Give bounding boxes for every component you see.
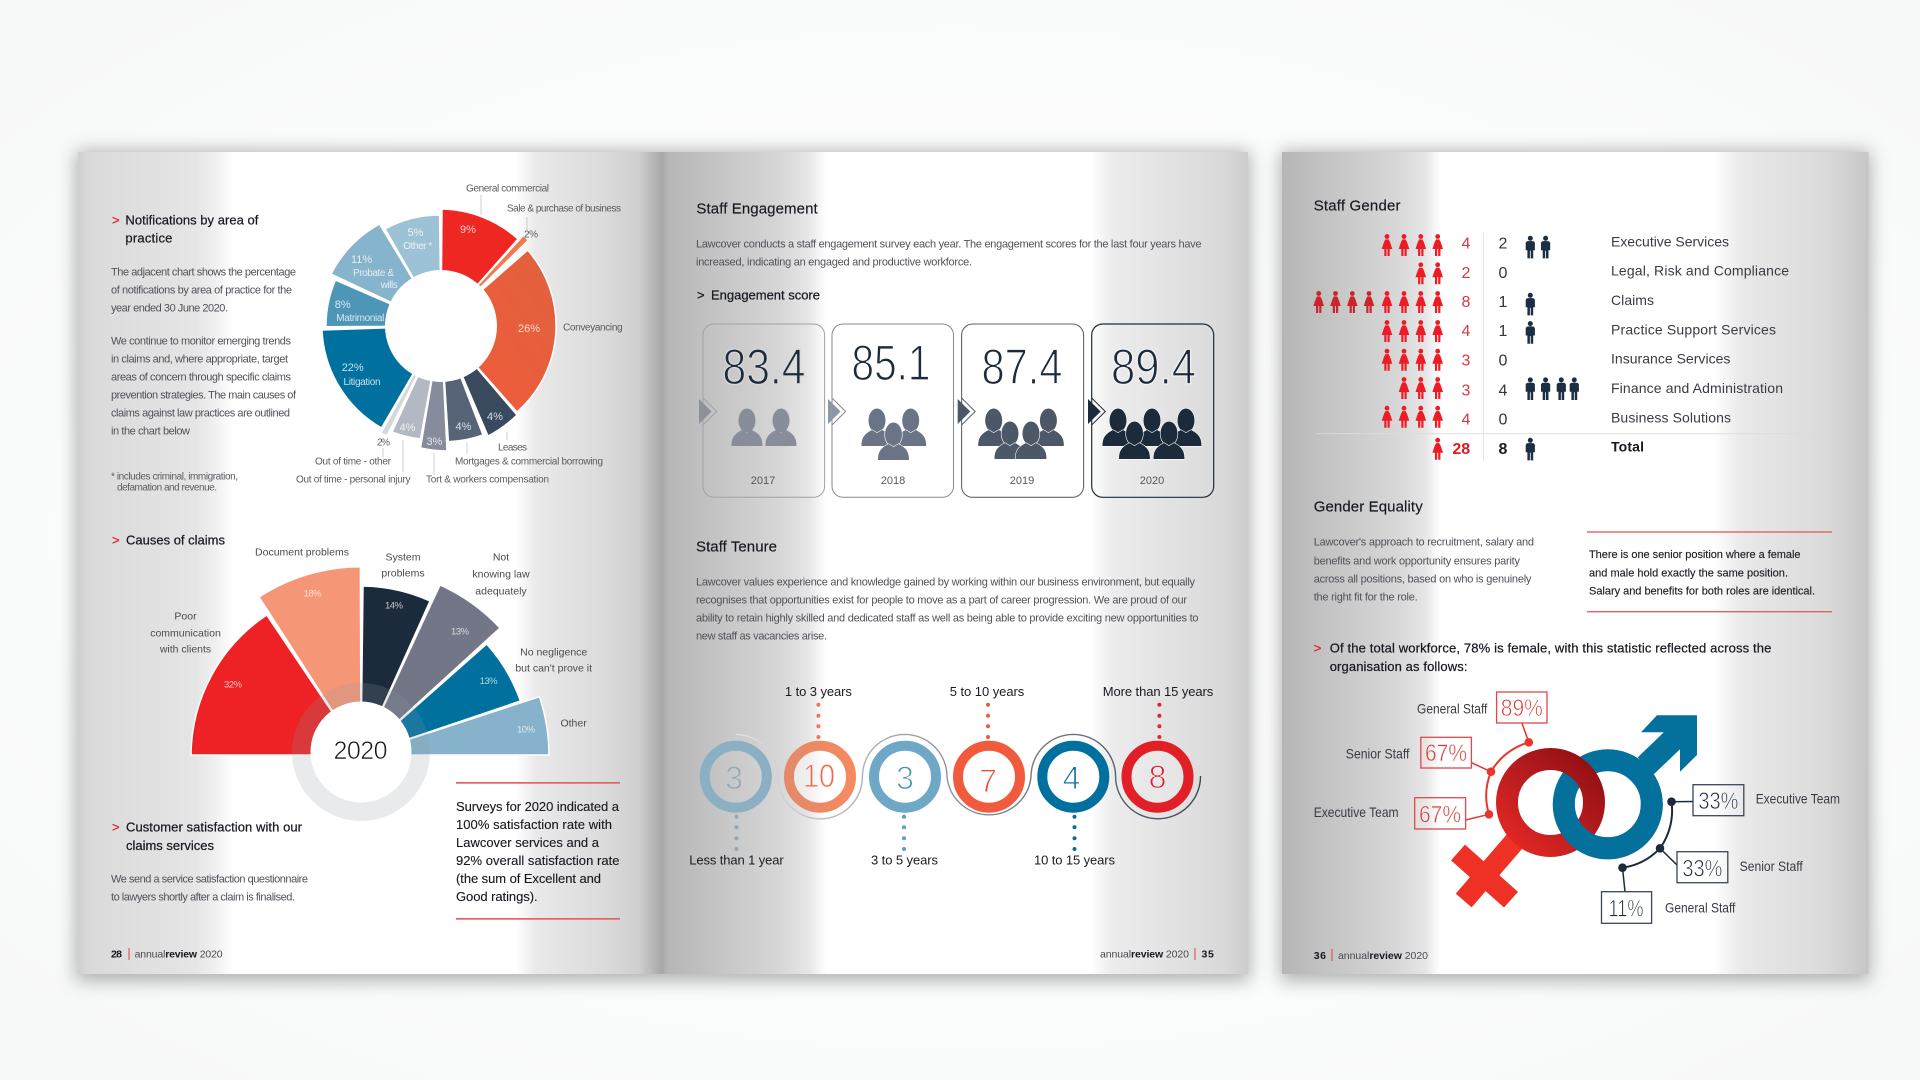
score 87.4: 87.4 <box>982 339 1062 395</box>
text block: engagement intro: Lawcover conducts a staff engagement survey each year. The engagement scores for the last four years have <box>696 239 1202 251</box>
female counts <box>1452 236 1471 458</box>
tenure: 1 to 3 years: 1 to 3 years <box>785 684 852 699</box>
text block: notifications intro: prevention strategies. The main causes of <box>111 390 297 402</box>
footer: page 36: 36 <box>1314 950 1326 962</box>
department labels: Insurance Services <box>1611 351 1730 367</box>
segment: personal injury 4% <box>392 326 441 439</box>
text block: engagement intro <box>696 239 1202 269</box>
donut value labels: Probate & <box>353 268 394 279</box>
fan centre: 2020 <box>310 702 412 802</box>
labels: male callouts <box>1665 791 1840 916</box>
text block: notifications intro: in the chart below <box>111 426 190 438</box>
labels: male callouts: Executive Team <box>1756 791 1840 807</box>
callout: survey results: Lawcover services and a <box>456 835 600 850</box>
labels: male callouts: Senior Staff <box>1740 858 1803 874</box>
donut outer labels: General commercial <box>466 183 549 194</box>
fan outer labels: No negligence <box>520 646 587 658</box>
box: general staff 11% <box>1602 892 1652 923</box>
fan percentage labels: 32% <box>224 680 243 690</box>
text block: tenure intro: ability to retain highly skilled and dedicated staff as well as being able to provide exciting new opportunities to <box>696 613 1198 625</box>
fan outer labels: Other <box>560 718 587 730</box>
donut value labels: 22% <box>342 362 364 374</box>
year 2017: 2017 <box>751 475 775 487</box>
female counts: 3 <box>1462 352 1471 370</box>
male symbol <box>1564 715 1697 848</box>
text block: customer satisfaction: to lawyers shortly after a claim is finalised. <box>111 892 295 904</box>
segment: sale of business 2% <box>441 236 528 326</box>
callout: senior position <box>1587 531 1832 612</box>
donut value labels: wills <box>380 280 398 291</box>
donut value labels: 4% <box>456 421 472 433</box>
donut outer labels: Out of time - other <box>315 456 392 467</box>
chevron arrow 2017 <box>699 398 717 425</box>
fan outer labels: but can't prove it <box>515 662 592 674</box>
male counts: 8 <box>1499 441 1508 458</box>
male counts: 0 <box>1499 412 1508 428</box>
department labels: Business Solutions <box>1611 409 1731 425</box>
wave line through tenure circles <box>736 734 1201 819</box>
labels: male callouts: General Staff <box>1665 900 1735 916</box>
heading: engagement score: Engagement score <box>711 287 820 302</box>
text block: notifications intro: of notifications by area of practice for the <box>111 285 292 297</box>
text block: notifications intro: We continue to monitor emerging trends <box>111 336 292 348</box>
male counts: 0 <box>1499 352 1508 370</box>
callout: senior position: and male hold exactly the same position. <box>1589 567 1788 579</box>
fan percentage labels: 18% <box>304 588 322 600</box>
heading: customer satisfaction: Customer satisfaction with our <box>126 819 303 834</box>
tenure: 3 to 5 years: 3 <box>896 760 914 796</box>
donut outer labels: 2% <box>524 229 538 240</box>
donut outer labels: Out of time - personal injury <box>296 474 410 485</box>
tenure: 5 to 10 years: 5 to 10 years <box>950 684 1025 699</box>
heading: total workforce: Of the total workforce, 78% is female, with this statistic reflected across the <box>1330 640 1771 655</box>
segment: litigation 22% <box>322 326 441 428</box>
fan outer labels: with clients <box>159 644 211 656</box>
text block: notifications intro: claims against law practices are outlined <box>111 408 290 420</box>
text block: gender equality: Lawcover's approach to recruitment, salary and <box>1314 537 1534 549</box>
segment: out of time other 2% <box>382 326 441 435</box>
female counts: 28 <box>1452 441 1470 458</box>
segment: leases 4% <box>441 326 517 436</box>
page shadows <box>76 151 1870 981</box>
fan percentage labels: 13% <box>480 676 498 687</box>
tenure: less than 1 year: Less than 1 year <box>689 853 784 868</box>
text block: tenure intro <box>696 576 1198 643</box>
male counts: 1 <box>1499 294 1508 311</box>
card: 2019 score <box>958 324 1084 497</box>
tenure: 3 to 5 years <box>871 746 938 868</box>
fan outer labels: Poor <box>174 610 197 622</box>
heading: causes of claims: > <box>112 532 120 547</box>
people icons 2020 <box>1102 408 1202 459</box>
wedge: system problems 14% <box>361 586 430 755</box>
male counts: 2 <box>1499 236 1508 252</box>
text block: gender equality <box>1314 537 1534 604</box>
segment: general commercial 9% <box>441 209 518 326</box>
donut value labels: 4% <box>487 411 503 423</box>
wedge: not knowing law 13% <box>361 585 500 755</box>
dividers for gender table <box>1316 233 1833 462</box>
fan percentage labels: 14% <box>385 600 404 612</box>
callout: survey results: Good ratings). <box>456 889 538 904</box>
fan percentage labels: 10% <box>517 724 536 736</box>
department labels: Practice Support Services <box>1611 321 1776 337</box>
text block: notifications intro <box>111 267 297 438</box>
heading: causes of claims: Causes of claims <box>126 532 226 547</box>
card: 2018 score <box>828 324 954 497</box>
tenure: more than 15 years <box>1103 684 1214 808</box>
donut value labels: 11% <box>351 254 372 266</box>
donut outer labels: Leases <box>498 442 527 453</box>
text block: customer satisfaction <box>111 874 308 904</box>
labels: female callouts <box>1314 701 1487 820</box>
people icons 2018 <box>862 408 926 460</box>
department labels: Executive Services <box>1611 233 1729 249</box>
labels: female callouts: Senior Staff <box>1346 745 1409 761</box>
fan chart: causes of claims <box>191 567 549 755</box>
segment: mortgages 4% <box>441 326 483 442</box>
department labels: Legal, Risk and Compliance <box>1611 263 1789 279</box>
box: senior staff 67%: 67% <box>1425 740 1467 767</box>
fan percentage labels: 13% <box>451 626 470 638</box>
tenure: 10 to 15 years <box>1034 746 1116 868</box>
text block: notifications intro: year ended 30 June 2020. <box>111 303 228 315</box>
heading: notifications by area of practice: > <box>112 212 120 228</box>
donut value labels: 8% <box>335 299 351 311</box>
tenure: 1 to 3 years <box>785 684 852 808</box>
footer: page 28: annualreview 2020 <box>135 948 223 960</box>
card: 2020 score <box>1088 324 1214 497</box>
segment: probate 11% <box>331 224 441 326</box>
donut outer labels: Sale & purchase of business <box>507 203 621 214</box>
fan outer labels: System <box>385 552 421 564</box>
fan outer labels: Document problems <box>255 546 349 558</box>
score 85.1: 85.1 <box>852 335 930 391</box>
text block: engagement intro: increased, indicating an engaged and productive workforce. <box>696 257 972 269</box>
heading: total workforce: organisation as follows: <box>1330 659 1468 674</box>
donut hole <box>385 270 497 382</box>
tenure: 10 to 15 years: 10 to 15 years <box>1034 853 1116 868</box>
labels: female callouts: General Staff <box>1417 701 1487 717</box>
heading: customer satisfaction: > <box>112 819 120 834</box>
female counts: 4 <box>1462 412 1471 428</box>
donut outer labels: Mortgages & commercial borrowing <box>455 456 603 467</box>
tenure: more than 15 years: 8 <box>1149 759 1166 795</box>
wedge: no negligence 13% <box>361 644 520 755</box>
footer: page 36: annualreview 2020 <box>1338 950 1428 962</box>
donut value labels: 26% <box>518 323 540 335</box>
heading: notifications by area of practice <box>112 212 259 246</box>
tenure: less than 1 year: 3 <box>725 760 743 796</box>
text block: gender equality: the right fit for the role. <box>1314 592 1418 604</box>
donut chart: notifications by area <box>322 209 556 451</box>
footnote <box>111 472 238 494</box>
segment: tort 3% <box>420 326 447 451</box>
score 89.4: 89.4 <box>1111 339 1196 395</box>
text block: notifications intro: in claims and, where appropriate, target <box>111 354 288 366</box>
footnote: * includes criminal, immigration, <box>111 472 238 482</box>
footer: page 28: 28 <box>111 948 122 960</box>
chevron arrow 2019 <box>958 398 975 425</box>
tenure: 5 to 10 years <box>950 684 1025 808</box>
department labels <box>1611 233 1789 455</box>
callout: survey results: (the sum of Excellent and <box>456 871 601 886</box>
female counts: 4 <box>1462 323 1471 340</box>
heading: gender equality: Gender Equality <box>1314 498 1423 515</box>
interlock overlap <box>1552 803 1663 860</box>
female counts: 4 <box>1462 236 1471 252</box>
box: general staff 11%: 11% <box>1608 896 1644 922</box>
callout: survey results: 100% satisfaction rate with <box>456 817 612 832</box>
chevron arrow 2020 <box>1088 398 1105 425</box>
wedge: poor communication 32% <box>191 615 361 755</box>
segment: conveyancing 26% <box>441 250 556 412</box>
fan outer labels: communication <box>150 628 221 640</box>
donut outer labels: 2% <box>377 437 390 448</box>
heading: staff tenure: Staff Tenure <box>696 538 777 555</box>
fan percentage labels <box>224 588 536 736</box>
donut value labels: 3% <box>426 436 443 448</box>
fan outer labels: problems <box>381 568 425 580</box>
male counts: 4 <box>1499 382 1508 400</box>
callout: survey results: Surveys for 2020 indicated a <box>456 799 620 814</box>
pictogram: male staff icons <box>1526 236 1579 460</box>
year 2019: 2019 <box>1010 475 1034 487</box>
footer: page 35: annualreview 2020 <box>1100 948 1189 960</box>
text block: gender equality: across all positions, based on who is genuinely <box>1314 573 1532 585</box>
segment: matrimonial 8% <box>326 280 441 327</box>
department labels: Finance and Administration <box>1611 380 1783 396</box>
heading: total workforce: > <box>1314 640 1321 655</box>
donut leader lines <box>383 195 527 475</box>
card: 2017 score <box>699 324 825 497</box>
department labels: Total <box>1611 439 1644 455</box>
male counts: 0 <box>1499 265 1508 282</box>
male counts: 1 <box>1499 323 1508 340</box>
box: general staff 89%: 89% <box>1501 695 1543 722</box>
department labels: Claims <box>1611 292 1654 308</box>
heading: notifications by area of practice: practice <box>125 230 172 246</box>
box: senior staff 33%: 33% <box>1682 856 1722 882</box>
text block: tenure intro: Lawcover values experience and knowledge gained by working within our business environment, but equally <box>696 576 1196 588</box>
female counts: 8 <box>1462 294 1471 311</box>
callout: senior position: There is one senior position where a female <box>1589 549 1800 561</box>
heading: engagement score: > <box>697 287 705 302</box>
female counts: 2 <box>1462 265 1471 282</box>
people icons 2017 <box>732 408 796 446</box>
callout: senior position: Salary and benefits for both roles are identical. <box>1589 586 1815 598</box>
heading: total workforce <box>1314 640 1771 674</box>
wedge: document problems 18% <box>259 567 361 755</box>
female symbol <box>1458 759 1594 900</box>
fan outer labels <box>150 546 592 730</box>
tenure: 10 to 15 years: 4 <box>1063 760 1080 796</box>
donut outer labels <box>296 183 623 485</box>
year 2018: 2018 <box>881 475 905 487</box>
tenure: more than 15 years: More than 15 years <box>1103 684 1214 699</box>
tenure: 5 to 10 years: 7 <box>979 763 997 799</box>
box: executive team 67%: 67% <box>1419 802 1461 828</box>
donut value labels: 9% <box>460 224 476 236</box>
icon: interlocked gender symbols <box>1458 715 1697 900</box>
panel: left page <box>78 152 662 974</box>
donut value labels: Matrimonial <box>336 313 384 324</box>
tenure: 3 to 5 years: 3 to 5 years <box>871 853 938 868</box>
donut outer labels: Tort & workers compensation <box>426 474 549 485</box>
heading: customer satisfaction <box>112 819 303 853</box>
heading: staff gender: Staff Gender <box>1314 198 1400 214</box>
fan outer labels: adequately <box>475 586 527 598</box>
footnote: defamation and revenue. <box>117 482 217 494</box>
footer: page 35: 35 <box>1202 948 1214 960</box>
text block: tenure intro: new staff as vacancies arise. <box>696 631 827 643</box>
tenure: 1 to 3 years: 10 <box>803 758 835 794</box>
callout: survey results: 92% overall satisfaction rate <box>456 853 620 868</box>
donut value labels: Other * <box>403 241 432 252</box>
donut value labels: Litigation <box>344 377 380 388</box>
text block: customer satisfaction: We send a service satisfaction questionnaire <box>111 874 308 886</box>
fan outer labels: Not <box>493 552 509 564</box>
female counts: 3 <box>1462 382 1471 400</box>
fan centre: 2020: 2020 <box>334 737 388 765</box>
donut value labels: 5% <box>408 227 424 239</box>
male counts <box>1499 236 1508 458</box>
year 2020: 2020 <box>1140 475 1164 487</box>
callout: survey results <box>456 782 620 920</box>
segment: other 5% <box>385 215 441 326</box>
female callouts <box>1314 692 1547 829</box>
people icons 2019 <box>978 408 1064 459</box>
male callouts <box>1602 785 1840 923</box>
text block: notifications intro: The adjacent chart shows the percentage <box>111 267 296 279</box>
tenure: less than 1 year <box>689 746 784 868</box>
heading: staff engagement: Staff Engagement <box>696 201 819 218</box>
chevron arrow 2018 <box>828 398 846 425</box>
donut value labels <box>335 224 540 448</box>
text block: notifications intro: areas of concern through specific claims <box>111 372 292 384</box>
fan outer labels: knowing law <box>472 568 530 580</box>
box: executive team 33%: 33% <box>1698 788 1738 815</box>
pictogram: female staff icons <box>1313 234 1443 460</box>
score 83.4: 83.4 <box>722 339 806 395</box>
wedge: other 10% <box>361 697 549 755</box>
heading: notifications by area of practice: Notifications by area of <box>125 212 259 228</box>
donut value labels: 4% <box>400 422 416 434</box>
panel: middle page <box>662 152 1248 974</box>
donut outer labels: Conveyancing <box>563 322 623 333</box>
text block: gender equality: benefits and work opportunity ensures parity <box>1314 555 1520 567</box>
text block: tenure intro: recognises that opportunities exist for people to move as a part of career progression. We are proud of our <box>696 595 1187 607</box>
panel: right page <box>1282 152 1868 974</box>
labels: female callouts: Executive Team <box>1314 804 1399 820</box>
fan grey ring <box>302 692 420 812</box>
heading: customer satisfaction: claims services <box>126 838 214 853</box>
